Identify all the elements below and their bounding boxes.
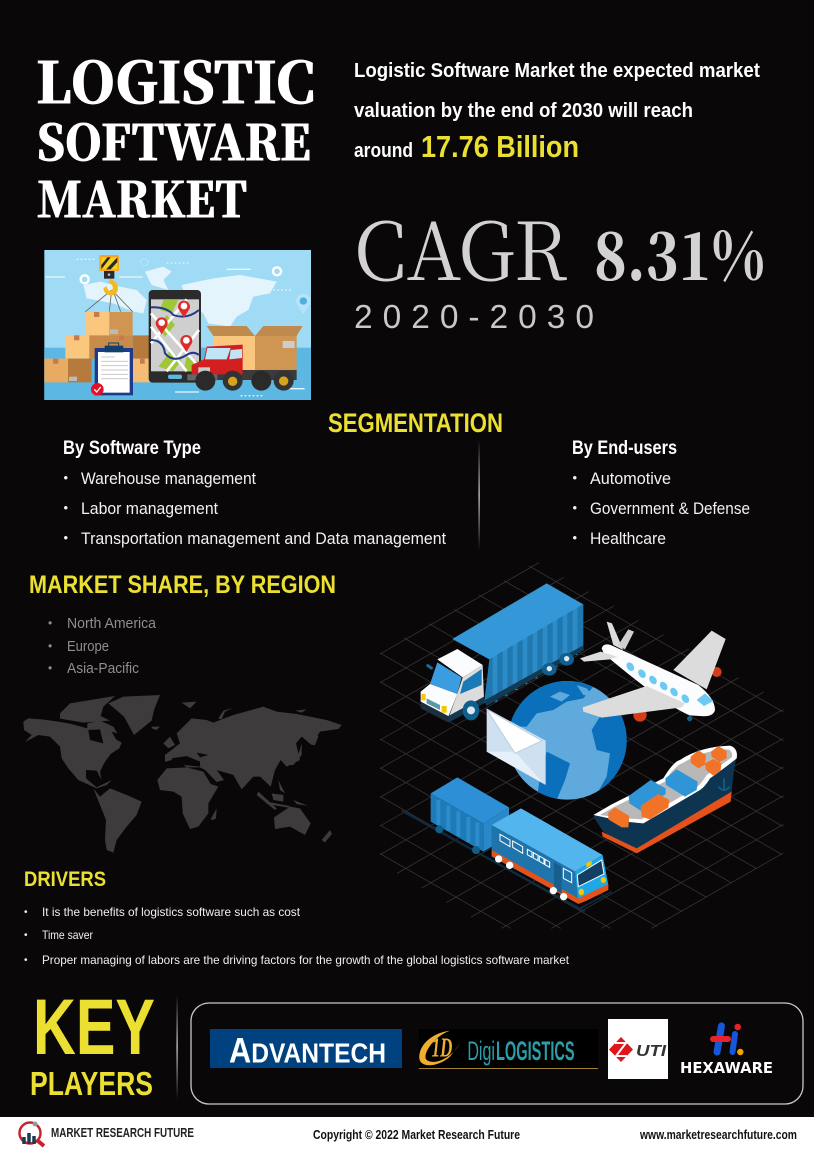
icon: container truck: [421, 583, 584, 723]
icon: location pin: [297, 294, 310, 313]
isometric grid: [380, 563, 783, 928]
heading: key players: KEY: [33, 982, 155, 1071]
icon: airplane: [580, 622, 726, 722]
market valuation text: 17.76 Billion: [421, 130, 579, 164]
heading: market share by region: MARKET SHARE, BY REGION: [29, 571, 336, 599]
segment list: by software type: By Software Type: [63, 437, 201, 459]
footer: Copyright © 2022 Market Research Future: [313, 1127, 520, 1142]
CAGR figure: CAGR: [354, 188, 568, 303]
region list: Europe: [67, 638, 109, 655]
drivers list: •: [24, 955, 28, 966]
logo: Advantech: ADVANTECH: [229, 1032, 386, 1070]
drivers list: Proper managing of labors are the driving factors for the growth of the global logistics software market: [42, 953, 570, 967]
footer: MARKET RESEARCH FUTURE: [51, 1125, 194, 1140]
CAGR figure: 8.31%: [594, 204, 765, 299]
icon: crane hook: [85, 255, 133, 312]
title: MARKET: [37, 162, 247, 231]
market valuation text: Logistic Software Market the expected market: [354, 60, 760, 82]
region list: •: [48, 661, 52, 675]
icon: clipboard checklist: [91, 343, 133, 396]
region list: North America: [67, 615, 157, 632]
segment list: by end-users: By End-users: [572, 437, 677, 459]
drivers list: It is the benefits of logistics software such as cost: [42, 905, 301, 919]
segment list: by software type: [63, 437, 446, 548]
segment list: by software type: •: [64, 470, 68, 485]
market valuation text: around: [354, 140, 413, 162]
icon: globe: [511, 681, 627, 800]
world map: [23, 695, 342, 853]
heading: drivers: DRIVERS: [24, 868, 106, 891]
logo: DigiLogistics: Digi: [467, 1036, 495, 1066]
segment list: by end-users: •: [572, 530, 578, 545]
segment list: by end-users: •: [572, 500, 578, 515]
heading: key players: PLAYERS: [30, 1065, 153, 1102]
drivers list: [24, 905, 570, 967]
icon: market research future logo: [20, 1122, 44, 1146]
icon: boxes: [44, 312, 150, 382]
region list: •: [48, 616, 52, 630]
segment list: by software type: •: [64, 500, 68, 515]
icon: delivery truck: [187, 326, 303, 391]
segment list: by software type: Transportation management and Data management: [81, 529, 446, 548]
region list: Asia-Pacific: [67, 660, 139, 677]
title: LOGISTIC: [36, 40, 315, 120]
title: [36, 40, 315, 231]
logo: UTI: [608, 1019, 668, 1079]
icon: envelope: [487, 708, 546, 785]
segment list: by software type: Labor management: [81, 499, 218, 518]
illustration: isometric transport: [380, 563, 783, 928]
heading: key players: [30, 982, 155, 1102]
logo: DigiLogistics: 1D: [432, 1033, 452, 1063]
drivers list: •: [24, 930, 28, 941]
logo: DigiLogistics: LOGISTICS: [496, 1036, 575, 1066]
segment list: by end-users: •: [572, 470, 578, 485]
segment list: by end-users: Automotive: [590, 469, 671, 488]
segment list: by software type: •: [64, 530, 68, 545]
CAGR figure: [354, 188, 765, 336]
icon: smartphone map: [149, 290, 201, 383]
logo: UTI: UTI: [636, 1043, 667, 1060]
panel: key player logos: [191, 1003, 803, 1104]
logo: DigiLogistics: [419, 1029, 598, 1069]
icon: cargo ship: [593, 746, 737, 853]
drivers list: Time saver: [42, 928, 93, 942]
market valuation text: [354, 60, 760, 164]
logo: Hexaware: [680, 1024, 773, 1077]
segment list: by end-users: Healthcare: [590, 529, 666, 548]
logo: Hexaware: HEXAWARE: [680, 1059, 773, 1077]
footer: [0, 1117, 814, 1150]
region list: •: [48, 639, 52, 653]
illustration: logistics hero image: [44, 250, 311, 400]
CAGR figure: 2020-2030: [354, 299, 594, 336]
segment list: by software type: Warehouse management: [81, 469, 256, 488]
region list: [48, 615, 157, 677]
title: SOFTWARE: [37, 105, 311, 174]
segment list: by end-users: Government & Defense: [590, 499, 750, 518]
heading: segmentation: SEGMENTATION: [328, 408, 503, 438]
segment list: by end-users: [572, 437, 750, 548]
market valuation text: valuation by the end of 2030 will reach: [354, 100, 693, 122]
icon: train: [402, 777, 612, 912]
drivers list: •: [24, 907, 28, 918]
